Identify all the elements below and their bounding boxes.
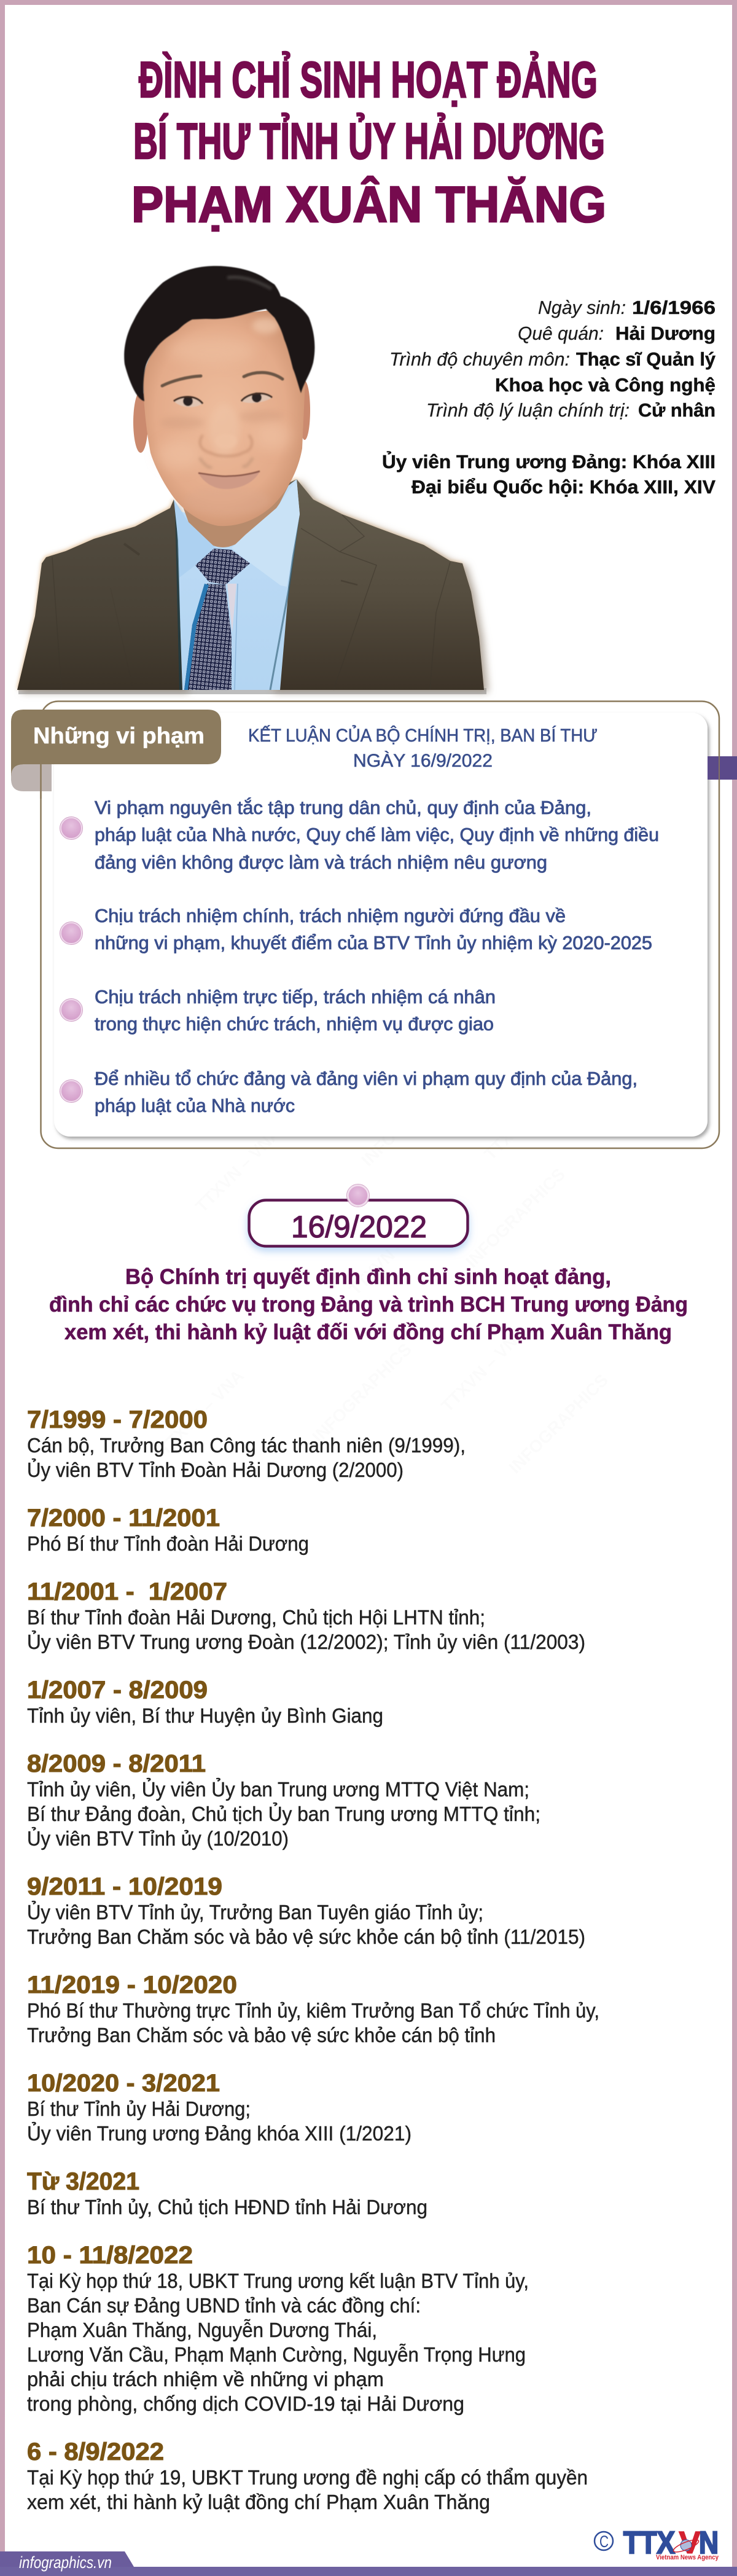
ribbon: Những vi phạm — [11, 710, 221, 777]
national assembly: Đại biểu Quốc hội: Khóa XIII, XIV — [411, 476, 716, 498]
timeline: 7/2000 - 11/2001: 7/2000 - 11/2001 — [27, 1505, 220, 1532]
timeline: 9/2011 - 10/2019: Ủy viên BTV Tỉnh ủy, Trưởng Ban Tuyên giáo Tỉnh ủy; — [27, 1901, 483, 1924]
bullet 3 — [60, 999, 82, 1021]
timeline: 8/2009 - 8/2011: 8/2009 - 8/2011 — [27, 1750, 206, 1777]
timeline: Từ 3/2021: Từ 3/2021 — [27, 2168, 139, 2195]
timeline: 8/2009 - 8/2011 — [27, 1750, 540, 1850]
timeline: 6 - 8/9/2022: xem xét, thi hành kỷ luật đồng chí Phạm Xuân Thăng — [27, 2491, 490, 2513]
timeline: 7/2000 - 11/2001 — [27, 1505, 309, 1555]
timeline: 10/2020 - 3/2021: Bí thư Tỉnh ủy Hải Dương; — [27, 2097, 251, 2120]
panel outer border — [41, 702, 719, 1148]
ears — [133, 381, 310, 453]
violation 3 — [60, 987, 496, 1035]
footer band — [0, 2551, 737, 2576]
suit, left side — [17, 499, 184, 690]
panel white card — [54, 713, 708, 1137]
hometown: Quê quán: — [518, 323, 604, 344]
timeline: 7/1999 - 7/2000: 7/1999 - 7/2000 — [27, 1406, 208, 1433]
decision statement: xem xét, thi hành kỷ luật đối với đồng chí Phạm Xuân Thăng — [64, 1320, 672, 1344]
timeline: 11/2019 - 10/2020: Trưởng Ban Chăm sóc và bảo vệ sức khỏe cán bộ tỉnh — [27, 2024, 496, 2046]
timeline: 6 - 8/9/2022 — [27, 2438, 588, 2513]
suit, right side — [270, 479, 484, 690]
timeline: 10/2020 - 3/2021: Ủy viên Trung ương Đảng khóa XIII (1/2021) — [27, 2122, 411, 2145]
necktie — [184, 549, 250, 690]
decision statement: đình chỉ các chức vụ trong Đảng và trình BCH Trung ương Đảng — [49, 1293, 688, 1317]
timeline: 11/2019 - 10/2020: 11/2019 - 10/2020 — [27, 1971, 237, 1999]
date badge: 16/9/2022 — [291, 1210, 427, 1244]
footer site name: infographics.vn — [19, 2553, 112, 2572]
decision statement — [49, 1265, 688, 1344]
timeline: 10 - 11/8/2022: 10 - 11/8/2022 — [27, 2242, 193, 2269]
copyright logo: TTXVN: N — [699, 2525, 719, 2560]
timeline: Từ 3/2021 — [27, 2168, 427, 2218]
central committee: Ủy viên Trung ương Đảng: Khóa XIII — [382, 450, 716, 472]
bullet 4 — [60, 1080, 82, 1102]
personal info text — [382, 297, 716, 498]
timeline: 10 - 11/8/2022: Phạm Xuân Thăng, Nguyễn Dương Thái, — [27, 2319, 377, 2341]
timeline: 11/2019 - 10/2020: Phó Bí thư Thường trực Tỉnh ủy, kiêm Trưởng Ban Tổ chức Tỉnh ủy, — [27, 1999, 599, 2022]
bullet 1 — [60, 817, 82, 839]
timeline: 8/2009 - 8/2011: Tỉnh ủy viên, Ủy viên Ủy ban Trung ương MTTQ Việt Nam; — [27, 1778, 529, 1801]
copyright logo: TTXVN — [595, 2525, 719, 2561]
timeline: 10 - 11/8/2022: trong phòng, chống dịch COVID-19 tại Hải Dương — [27, 2392, 464, 2415]
eyes — [174, 393, 272, 407]
timeline: 11/2019 - 10/2020 — [27, 1971, 599, 2046]
violation 3: trong thực hiện chức trách, nhiệm vụ được giao — [95, 1014, 494, 1035]
copyright logo: TTXVN: TTX — [623, 2525, 675, 2560]
timeline: 8/2009 - 8/2011: Ủy viên BTV Tỉnh ủy (10/2010) — [27, 1827, 289, 1850]
hometown: Hải Dương — [615, 323, 716, 344]
timeline: 10 - 11/8/2022 — [27, 2242, 529, 2415]
violation 1: Vi phạm nguyên tắc tập trung dân chủ, quy định của Đảng, — [95, 797, 591, 818]
copyright symbol — [595, 2532, 613, 2551]
ribbon fold — [11, 753, 52, 799]
background watermarks — [155, 1063, 612, 1477]
portrait photo: Phạm Xuân Thăng — [17, 266, 486, 694]
timeline: 7/1999 - 7/2000 — [27, 1406, 466, 1481]
facial shading — [157, 318, 291, 515]
violation 1: đảng viên không được làm và trách nhiệm nêu gương — [95, 852, 547, 873]
timeline: 6 - 8/9/2022: 6 - 8/9/2022 — [27, 2438, 164, 2465]
political theory: Trình độ lý luận chính trị: — [426, 399, 630, 421]
copyright symbol: C — [599, 2532, 609, 2551]
timeline: 7/2000 - 11/2001: Phó Bí thư Tỉnh đoàn Hải Dương — [27, 1532, 309, 1555]
birth date: Ngày sinh: — [538, 297, 626, 318]
copyright logo: TTXVN: Vietnam News Agency — [656, 2554, 719, 2561]
timeline: 10 - 11/8/2022: phải chịu trách nhiệm về những vi phạm — [27, 2368, 384, 2390]
timeline: 10 - 11/8/2022: Ban Cán sự Đảng UBND tỉnh và các đồng chí: — [27, 2294, 421, 2317]
timeline: 9/2011 - 10/2019: 9/2011 - 10/2019 — [27, 1873, 222, 1900]
hair — [124, 266, 314, 401]
ribbon: Những vi phạm: Những vi phạm — [33, 723, 205, 748]
panel: violations — [11, 702, 737, 1148]
timeline: 11/2001 - 1/2007: Ủy viên BTV Trung ương Đoàn (12/2002); Tỉnh ủy viên (11/2003) — [27, 1631, 585, 1653]
political theory: Cử nhân — [638, 399, 716, 421]
panel heading: KẾT LUẬN CỦA BỘ CHÍNH TRỊ, BAN BÍ THƯ — [248, 725, 598, 746]
violation 4 — [60, 1068, 638, 1116]
timeline: 6 - 8/9/2022: Tại Kỳ họp thứ 19, UBKT Trung ương đề nghị cấp có thẩm quyền — [27, 2466, 588, 2489]
timeline: 7/1999 - 7/2000: Cán bộ, Trưởng Ban Công tác thanh niên (9/1999), — [27, 1434, 466, 1457]
violation 4: pháp luật của Nhà nước — [95, 1095, 295, 1116]
timeline: 7/1999 - 7/2000: Ủy viên BTV Tỉnh Đoàn Hải Dương (2/2000) — [27, 1458, 404, 1481]
timeline: 9/2011 - 10/2019: Trưởng Ban Chăm sóc và bảo vệ sức khỏe cán bộ tỉnh (11/2015) — [27, 1925, 585, 1948]
face — [143, 310, 305, 526]
shirt — [176, 479, 300, 690]
timeline: 9/2011 - 10/2019 — [27, 1873, 585, 1948]
panel heading — [248, 725, 598, 771]
badge knob — [346, 1184, 370, 1207]
timeline: 1/2007 - 8/2009: Tỉnh ủy viên, Bí thư Huyện ủy Bình Giang — [27, 1704, 383, 1727]
right purple tab — [700, 756, 737, 780]
timeline: 1/2007 - 8/2009: 1/2007 - 8/2009 — [27, 1677, 208, 1704]
neck — [175, 485, 289, 547]
timeline: 10/2020 - 3/2021: 10/2020 - 3/2021 — [27, 2070, 220, 2097]
timeline: 11/2001 - 1/2007: Bí thư Tỉnh đoàn Hải Dương, Chủ tịch Hội LHTN tỉnh; — [27, 1606, 485, 1629]
eyebrows — [162, 372, 283, 386]
globe — [672, 2537, 700, 2554]
timeline: 11/2001 - 1/2007 — [27, 1578, 585, 1653]
copyright logo: TTXVN: V — [679, 2525, 701, 2560]
qualification line 2: Khoa học và Công nghệ — [495, 374, 716, 396]
violation 1 — [60, 797, 659, 873]
violation 1: pháp luật của Nhà nước, Quy chế làm việc, Quy định về những điều — [95, 824, 659, 845]
decision statement: Bộ Chính trị quyết định đình chỉ sinh hoạt đảng, — [125, 1265, 611, 1289]
violation 2: Chịu trách nhiệm chính, trách nhiệm người đứng đầu về — [95, 906, 566, 926]
mouth — [198, 471, 260, 489]
timeline: 11/2001 - 1/2007: 11/2001 - 1/2007 — [27, 1578, 227, 1605]
professional qualification: Trình độ chuyên môn: — [389, 348, 570, 370]
timeline: 10/2020 - 3/2021 — [27, 2070, 411, 2145]
timeline: 8/2009 - 8/2011: Bí thư Đảng đoàn, Chủ tịch Ủy ban Trung ương MTTQ tỉnh; — [27, 1803, 540, 1825]
violation 3: Chịu trách nhiệm trực tiếp, trách nhiệm cá nhân — [95, 987, 496, 1008]
right purple tab edge — [708, 756, 737, 780]
birth date: 1/6/1966 — [632, 297, 716, 318]
violation 2 — [60, 906, 652, 953]
title: PHẠM XUÂN THĂNG — [131, 176, 606, 233]
bullet 2 — [60, 922, 82, 945]
violation 2: những vi phạm, khuyết điểm của BTV Tỉnh ủy nhiệm kỳ 2020-2025 — [95, 933, 652, 953]
timeline: 1/2007 - 8/2009 — [27, 1677, 383, 1727]
timeline: 10 - 11/8/2022: Tại Kỳ họp thứ 18, UBKT Trung ương kết luận BTV Tỉnh ủy, — [27, 2269, 529, 2292]
shirt collars — [174, 499, 217, 577]
timeline: Từ 3/2021: Bí thư Tỉnh ủy, Chủ tịch HĐND tỉnh Hải Dương — [27, 2196, 427, 2218]
title — [131, 50, 606, 233]
timeline: 10 - 11/8/2022: Lương Văn Cầu, Phạm Mạnh Cường, Nguyễn Trọng Hưng — [27, 2343, 526, 2366]
nose — [200, 434, 252, 456]
date badge — [249, 1184, 468, 1246]
violation 4: Để nhiều tổ chức đảng và đảng viên vi phạm quy định của Đảng, — [95, 1068, 638, 1089]
suit details — [52, 515, 450, 690]
panel heading: NGÀY 16/9/2022 — [353, 751, 493, 771]
professional qualification: Thạc sĩ Quản lý — [576, 348, 716, 370]
